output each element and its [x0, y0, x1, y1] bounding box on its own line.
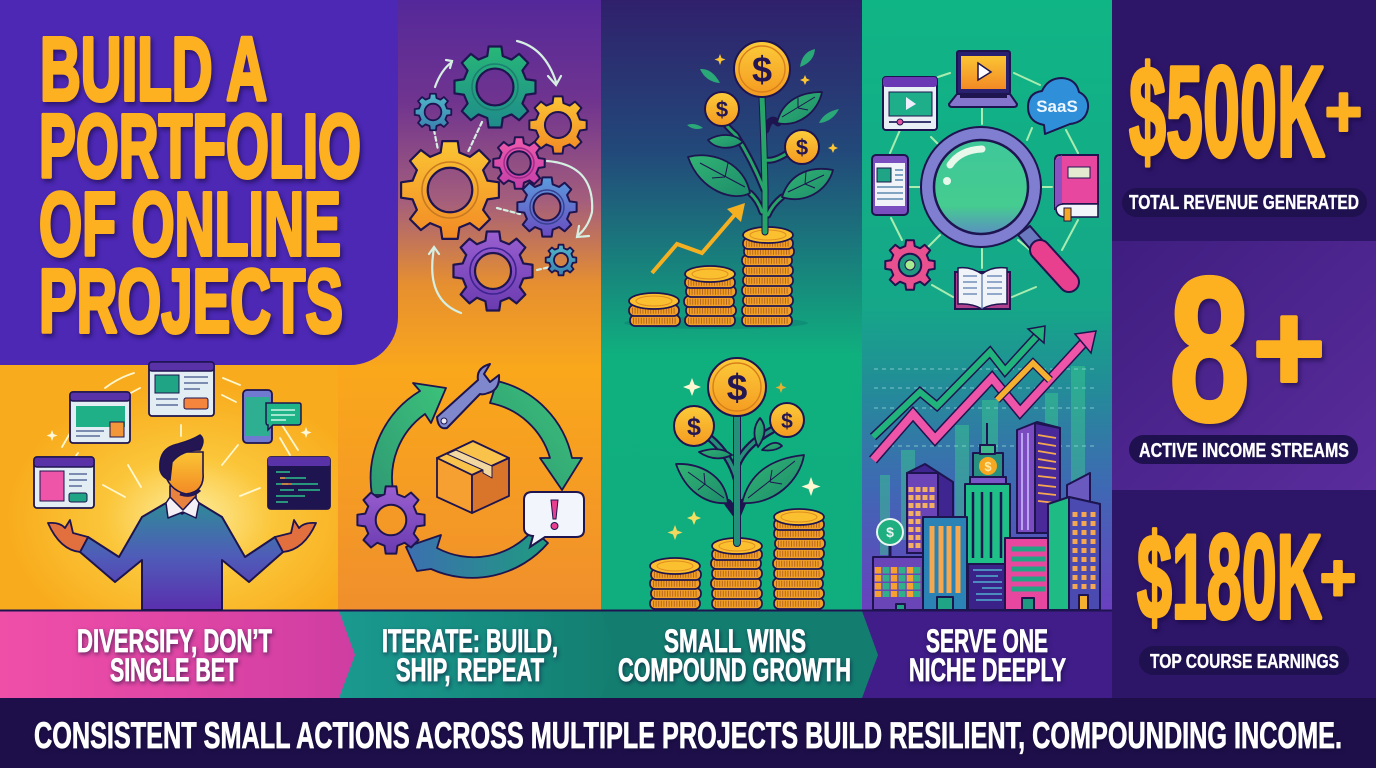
- icon: pink gear: [493, 137, 545, 189]
- icon: right dollar coin: $: [781, 410, 793, 433]
- chart: green line: [873, 336, 1037, 437]
- icon: phone with chat bubble: [243, 390, 301, 443]
- stat pill: [1129, 435, 1358, 464]
- title: PORTFOLIO: [39, 97, 361, 197]
- icon: small glass tower: [1067, 473, 1090, 505]
- chart: yellow line: [997, 363, 1050, 400]
- banner: small wins: SMALL WINS: [664, 623, 806, 659]
- icon: left dollar coin: $: [687, 413, 701, 441]
- icon: SaaS cloud: SaaS: [1036, 97, 1078, 116]
- panel: niche background: [862, 0, 1112, 611]
- icon: stem: [710, 417, 772, 543]
- title: PROJECTS: [39, 252, 343, 352]
- icon: middle coin stack: [711, 538, 762, 609]
- icon: build ship repeat loop: [357, 364, 584, 578]
- title: OF ONLINE: [39, 175, 341, 275]
- icon: round dollar sign: [877, 519, 903, 558]
- icon: tower coin: $: [984, 459, 992, 474]
- icon: grid building: [873, 557, 923, 610]
- icon: video window: [883, 77, 937, 130]
- icon: SaaS cloud: [1028, 78, 1088, 134]
- icon: small floating leaves: [687, 49, 839, 129]
- icon: pink building: [1005, 538, 1051, 610]
- icon: tiny blue gear: [415, 94, 451, 130]
- icon: leaves: [676, 418, 804, 503]
- stat value: +: [1325, 72, 1362, 152]
- panel: stats column: [1112, 0, 1376, 698]
- icon: right coin stack: [773, 509, 825, 609]
- icon: left dollar coin: [674, 406, 714, 446]
- icon: lower money plant: [650, 358, 825, 609]
- icon: magnifying glass: [921, 127, 1069, 282]
- icon: large dollar coin: [708, 358, 766, 416]
- panel: iterate background top: [338, 0, 601, 365]
- banner: diversify: [0, 611, 355, 698]
- icon: teal tower: [923, 517, 967, 610]
- icon: sparkles: [668, 378, 820, 540]
- title panel: [0, 0, 398, 365]
- icon: skyline: [873, 422, 1100, 610]
- icon: purple gear: [453, 231, 533, 311]
- icon: purple gear: [357, 486, 425, 554]
- icon: stem: [722, 97, 792, 232]
- icon: green windowed building: [1048, 497, 1100, 610]
- stat: total revenue: [1112, 0, 1376, 241]
- stat value: 8: [1169, 235, 1250, 464]
- icon: person juggling projects: [34, 362, 330, 610]
- icon: code window: [268, 457, 330, 509]
- icon: laptop: [949, 51, 1017, 107]
- banner: iterate: ITERATE: BUILD,: [382, 623, 558, 659]
- icon: sparkles: [714, 54, 838, 153]
- panel: small wins background: [601, 0, 862, 611]
- icon: phone article: [872, 155, 908, 215]
- icon: right dollar coin: $: [796, 135, 808, 160]
- icon: growth arrow: [652, 211, 738, 273]
- banner: takeaways: [0, 611, 1112, 698]
- icon: large dollar coin: $: [727, 367, 748, 408]
- panel: diversify background: [0, 365, 338, 611]
- stat: top course: [1112, 490, 1376, 698]
- banner: diversify: SINGLE BET: [110, 652, 238, 688]
- icon: tall purple tower: [1017, 422, 1060, 533]
- banner: niche: [862, 611, 1112, 698]
- icon: connector ring: [890, 73, 1078, 297]
- icon: interlocking gears: [401, 41, 592, 313]
- icon: pale rotation arrows: [429, 41, 592, 313]
- title: [39, 20, 361, 352]
- banner: niche: NICHE DEEPLY: [909, 652, 1066, 688]
- icon: coin stack medium: [684, 266, 736, 326]
- icon: large dollar coin: $: [752, 49, 772, 90]
- icon: browser window left: [34, 457, 94, 508]
- icon: right dollar coin: [770, 403, 804, 437]
- icon: sparkles: [46, 427, 312, 441]
- chart: pink line: [873, 338, 1088, 460]
- banner: diversify: DIVERSIFY, DON’T: [77, 623, 272, 659]
- icon: tiny teal gear: [546, 245, 576, 275]
- banner: small wins: COMPOUND GROWTH: [618, 652, 851, 688]
- icon: shipping box: [437, 441, 509, 513]
- icon: pink gear: [885, 240, 935, 290]
- banner: iterate: [338, 611, 617, 698]
- icon: right dollar coin: [785, 130, 819, 164]
- icon: money plant on rising coins: [624, 41, 839, 329]
- icon: large dollar coin: [734, 41, 790, 97]
- icon: motion arcs: [62, 373, 298, 497]
- icon: round dollar sign: $: [886, 524, 894, 540]
- stat value: +: [1253, 279, 1325, 418]
- icon: alert speech bubble: [524, 492, 584, 547]
- icon: person: [48, 435, 316, 610]
- icon: wrench: [437, 364, 499, 428]
- title: BUILD A: [40, 20, 267, 120]
- icon: leaves: [688, 92, 833, 199]
- icon: coin stack tall: [742, 227, 794, 326]
- panel: iterate background bottom: [338, 365, 601, 611]
- icon: open book: [955, 268, 1010, 309]
- icon: left dollar coin: $: [716, 97, 728, 122]
- stat pill: [1139, 646, 1349, 675]
- stat value: +: [1320, 540, 1356, 614]
- footer takeaway: [0, 698, 1376, 768]
- icon: coin stack small: [629, 293, 680, 326]
- icon: left dollar coin: [705, 92, 739, 126]
- icon: left coin stack: [650, 558, 701, 609]
- banner: niche: SERVE ONE: [926, 623, 1048, 659]
- icon: browser window upper left: [70, 392, 130, 443]
- chart: rising lines over city skyline: [873, 326, 1100, 610]
- icon: blue gear: [517, 177, 577, 237]
- stat: active income: [1112, 235, 1376, 490]
- icon: large orange gear: [401, 141, 499, 239]
- icon: loop arrows: [371, 381, 582, 578]
- icon: browser window top: [149, 362, 214, 416]
- icon: central tower: [965, 445, 1010, 610]
- banner: small wins: [601, 611, 878, 698]
- icon: tower coin: [979, 423, 997, 475]
- chart: dashed gridlines: [874, 369, 1096, 446]
- icon: pink book: [1055, 155, 1098, 221]
- chart: background bars: [880, 366, 1085, 555]
- icon: green gear: [454, 46, 536, 128]
- banner: iterate: SHIP, REPEAT: [396, 652, 544, 688]
- icon: magnifier with niche products: [872, 51, 1098, 309]
- icon: shadow: [624, 317, 808, 329]
- icon: small orange gear: [529, 96, 587, 154]
- icon: purple tower: [907, 464, 953, 553]
